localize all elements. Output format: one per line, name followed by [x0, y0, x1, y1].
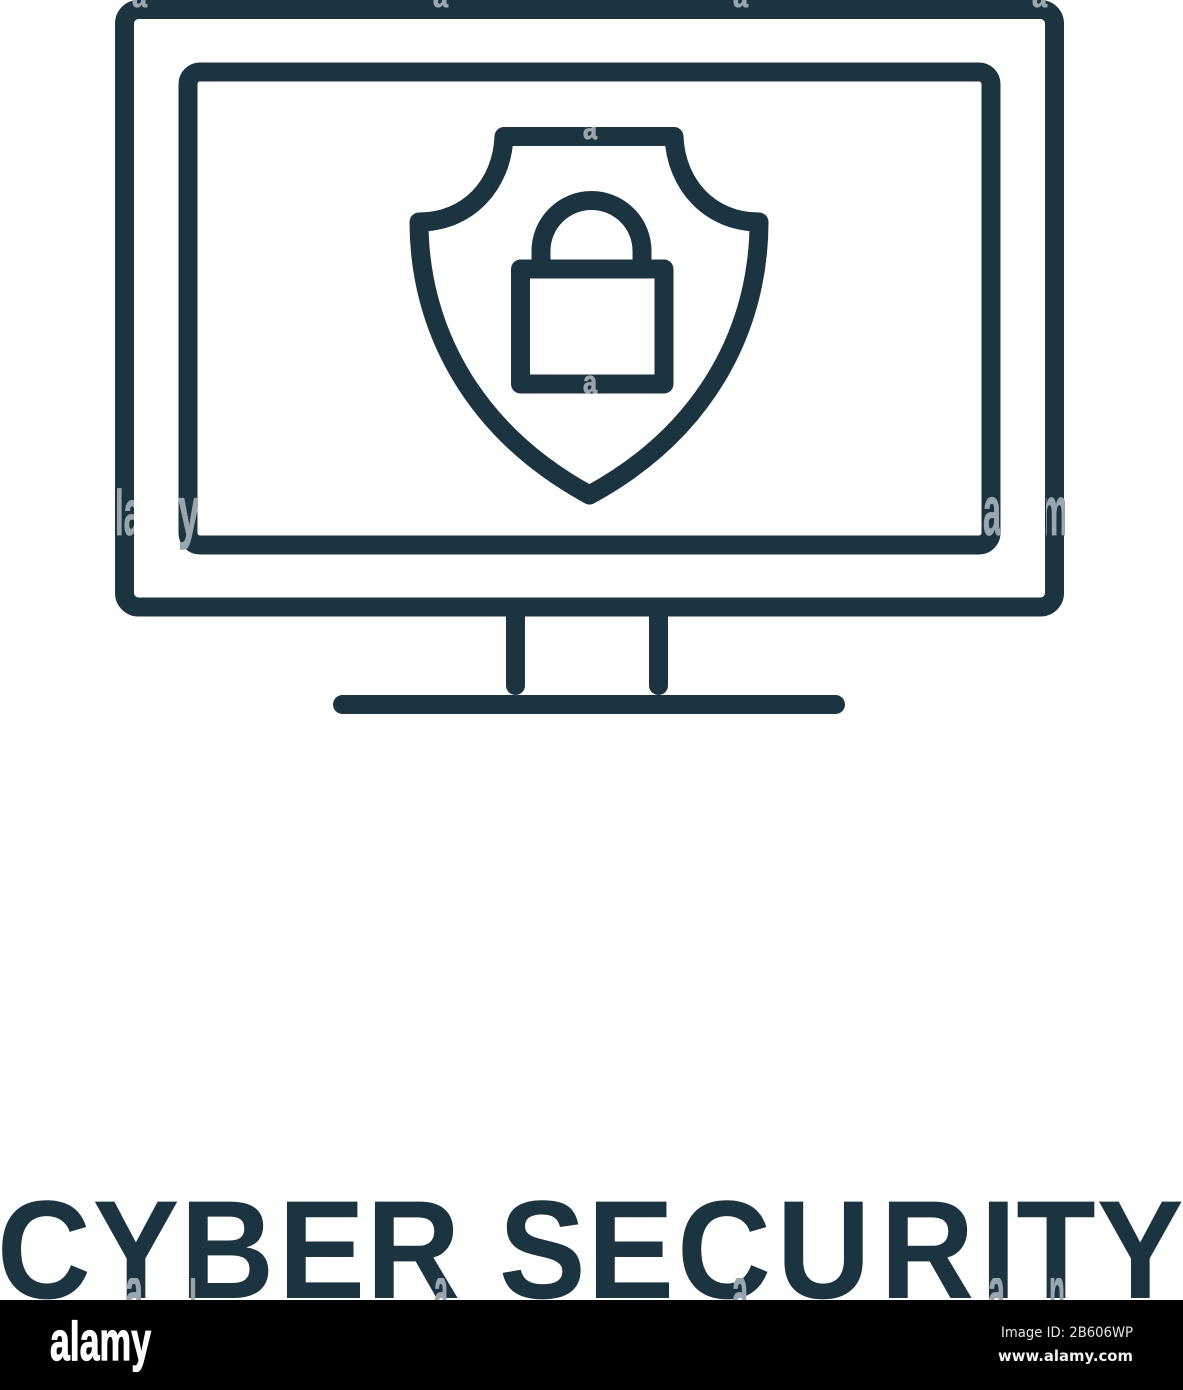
- watermark fragments on icon strokes: [115, 0, 1068, 550]
- monitor screen: [188, 72, 991, 545]
- image id: Image ID: 2B606WP: [1001, 1325, 1133, 1341]
- website: www.alamy.com: [998, 1347, 1133, 1365]
- watermark fragments on title letters: l: [189, 1252, 197, 1330]
- footer bar: [0, 1300, 1183, 1390]
- watermark fragments on icon strokes: a: [583, 364, 597, 400]
- watermark fragments on icon strokes: a: [983, 472, 1001, 550]
- watermark fragments on icon strokes: la: [115, 477, 141, 549]
- watermark fragments on icon strokes: a: [583, 110, 597, 146]
- icon: computer monitor with shield and padlock: [124, 10, 1054, 704]
- icon: shield: [419, 136, 759, 495]
- watermark fragments on title letters: a: [434, 1252, 448, 1330]
- infographic canvas: n: [1049, 1252, 1065, 1330]
- title: CYBER SECURITY: [0, 1172, 1183, 1328]
- monitor outer frame: [124, 10, 1054, 607]
- logo: alamy: alamy: [50, 1310, 151, 1372]
- watermark fragments on title letters: [126, 1278, 1064, 1300]
- watermark fragments on icon strokes: y: [178, 472, 200, 550]
- watermark fragments on title letters: a: [988, 1252, 1005, 1330]
- monitor stand: [342, 616, 836, 704]
- infographic canvas: m: [1040, 472, 1068, 550]
- watermark fragments on title letters: a: [125, 1252, 143, 1330]
- icon: padlock: [520, 200, 664, 384]
- watermark fragments on title letters: a: [732, 1252, 748, 1330]
